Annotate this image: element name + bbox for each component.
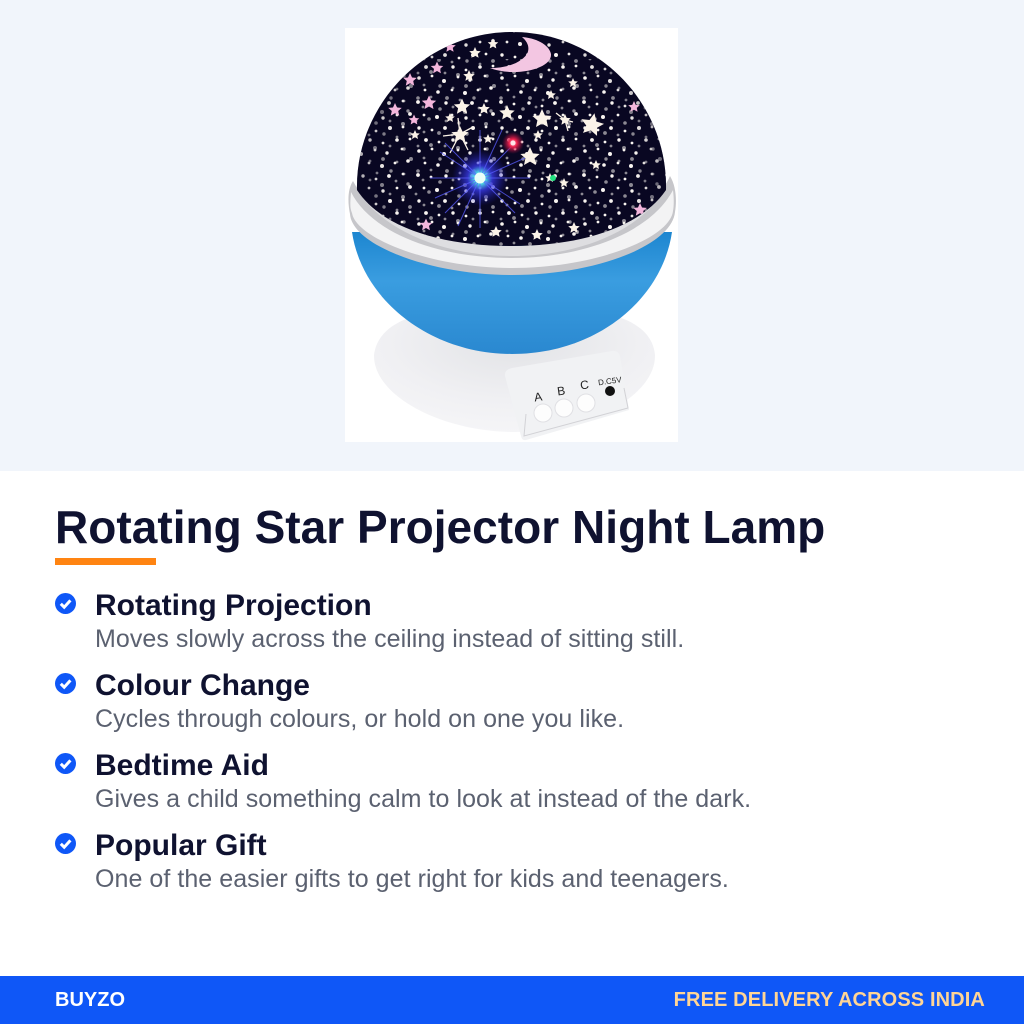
star bursts: [443, 113, 573, 153]
control box: [505, 351, 629, 440]
button labels: C: [579, 377, 590, 392]
dome with stars: [356, 32, 666, 246]
feature heading: Rotating Projection: [95, 589, 372, 622]
feature: Bedtime Aid: [55, 749, 751, 813]
title: Rotating Star Projector Night Lamp: [55, 501, 825, 553]
icon: check badge: [55, 673, 76, 694]
lamp blue body: [352, 232, 672, 354]
feature description: One of the easier gifts to get right for kids and teenagers.: [95, 865, 729, 893]
red light: [502, 132, 524, 154]
hero band: [0, 0, 1024, 471]
feature: Popular Gift: [55, 829, 729, 893]
feature heading: Colour Change: [95, 669, 310, 702]
icon: check badge: [55, 833, 76, 854]
buttons: [534, 394, 595, 422]
feature description: Gives a child something calm to look at instead of the dark.: [95, 785, 751, 813]
feature description: Cycles through colours, or hold on one you like.: [95, 705, 624, 733]
delivery message: FREE DELIVERY ACROSS INDIA: [674, 989, 985, 1011]
white rim: [348, 176, 676, 275]
feature: Colour Change: [55, 669, 624, 733]
button labels: [533, 375, 623, 404]
blue light burst: [430, 130, 530, 228]
green light: [550, 175, 556, 181]
lamp base: [374, 305, 655, 432]
footer bar: [0, 976, 1024, 1024]
button labels: B: [556, 383, 566, 398]
icon: check badge: [55, 753, 76, 774]
title accent underline: [55, 558, 156, 565]
feature: Rotating Projection: [55, 589, 684, 653]
feature heading: Bedtime Aid: [95, 749, 269, 782]
product photo: star projector lamp: [345, 28, 678, 442]
button labels: A: [533, 389, 543, 404]
moon: [490, 37, 551, 72]
feature heading: Popular Gift: [95, 829, 267, 862]
brand name: BUYZO: [55, 989, 125, 1011]
stars: [410, 38, 606, 240]
power jack: [605, 386, 615, 396]
icon: check badge: [55, 593, 76, 614]
button labels: D.C5V: [598, 375, 623, 387]
feature description: Moves slowly across the ceiling instead of sitting still.: [95, 625, 684, 653]
